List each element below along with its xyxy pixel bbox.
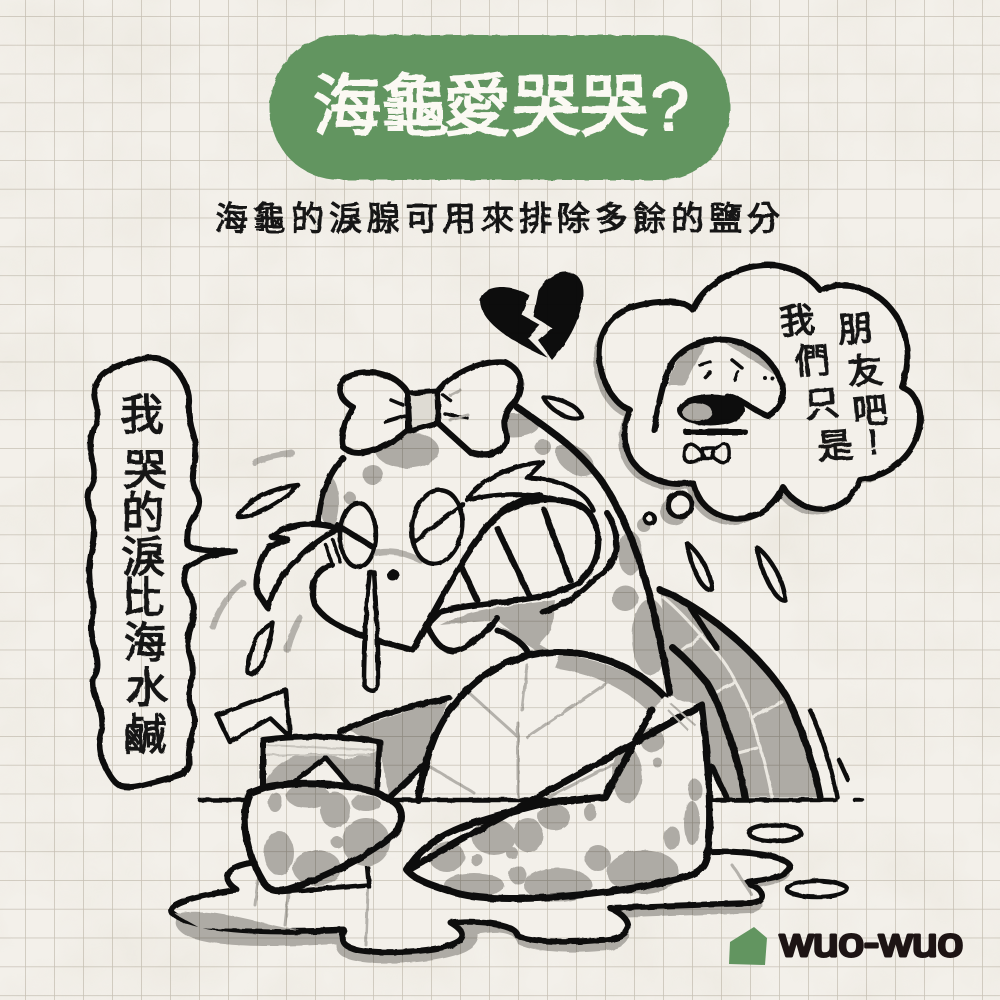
thought bubble text: 只 xyxy=(803,384,841,425)
rear flipper xyxy=(660,590,848,798)
thought bubble dots xyxy=(668,493,692,517)
illustration: crying sea turtle scene xyxy=(88,265,920,963)
speech bubble text: 水 xyxy=(126,665,168,713)
big tear stream xyxy=(256,524,337,608)
turtle head and neck xyxy=(256,407,670,693)
neck and head outline xyxy=(517,407,670,693)
thought bubble text xyxy=(778,301,889,467)
left eye xyxy=(337,503,376,567)
title text: 海龜愛哭哭? xyxy=(313,69,689,145)
speech bubble text: 淚 xyxy=(122,534,164,582)
front right flipper xyxy=(407,697,710,902)
speech bubble text: 我 xyxy=(120,392,164,440)
thought bubble xyxy=(593,265,920,532)
subtitle: 海龜的淚腺可用來排除多餘的鹽分 xyxy=(215,200,785,237)
table horizon line xyxy=(200,798,862,802)
logo wordmark: wuo-wuo xyxy=(779,921,963,965)
runny nose drip xyxy=(364,572,378,690)
wrinkled brow xyxy=(467,462,593,512)
front left flipper xyxy=(245,784,401,891)
drink glass with straw xyxy=(217,690,380,892)
speech bubble text xyxy=(120,392,168,760)
flipper spots xyxy=(429,728,702,902)
thought bubble text: 是 xyxy=(816,426,854,467)
speech bubble text: 的 xyxy=(122,490,164,538)
puddle drop ovals xyxy=(749,825,847,897)
thought bubble text: ! xyxy=(867,423,880,462)
tongue xyxy=(427,618,528,652)
thought bubble text: 們 xyxy=(793,341,831,382)
hair bow xyxy=(340,362,521,455)
speech bubble text: 哭 xyxy=(124,447,166,495)
snout xyxy=(313,495,540,650)
speech bubble text: 鹹 xyxy=(124,712,166,760)
head spots xyxy=(321,413,668,675)
logo xyxy=(729,921,963,965)
right eye xyxy=(407,487,467,567)
speech bubble text: 比 xyxy=(122,575,164,623)
water puddle xyxy=(171,852,790,963)
logo house icon xyxy=(729,927,767,965)
thought bubble text: 吧 xyxy=(851,391,889,432)
thought bubble text: 朋 xyxy=(836,309,874,350)
title pill xyxy=(270,35,730,180)
cheek line xyxy=(543,513,616,612)
tear drops xyxy=(213,397,785,675)
left speech bubble xyxy=(88,358,235,787)
mouth with teeth xyxy=(427,500,598,625)
mini turtle in bubble xyxy=(654,340,783,463)
thought bubble text: 友 xyxy=(846,351,884,392)
speech bubble text: 海 xyxy=(124,620,166,668)
turtle shell xyxy=(340,652,665,800)
nostril xyxy=(387,569,399,581)
thought bubble text: 我 xyxy=(778,301,816,342)
broken heart xyxy=(480,272,583,360)
flipper spots xyxy=(264,784,390,886)
